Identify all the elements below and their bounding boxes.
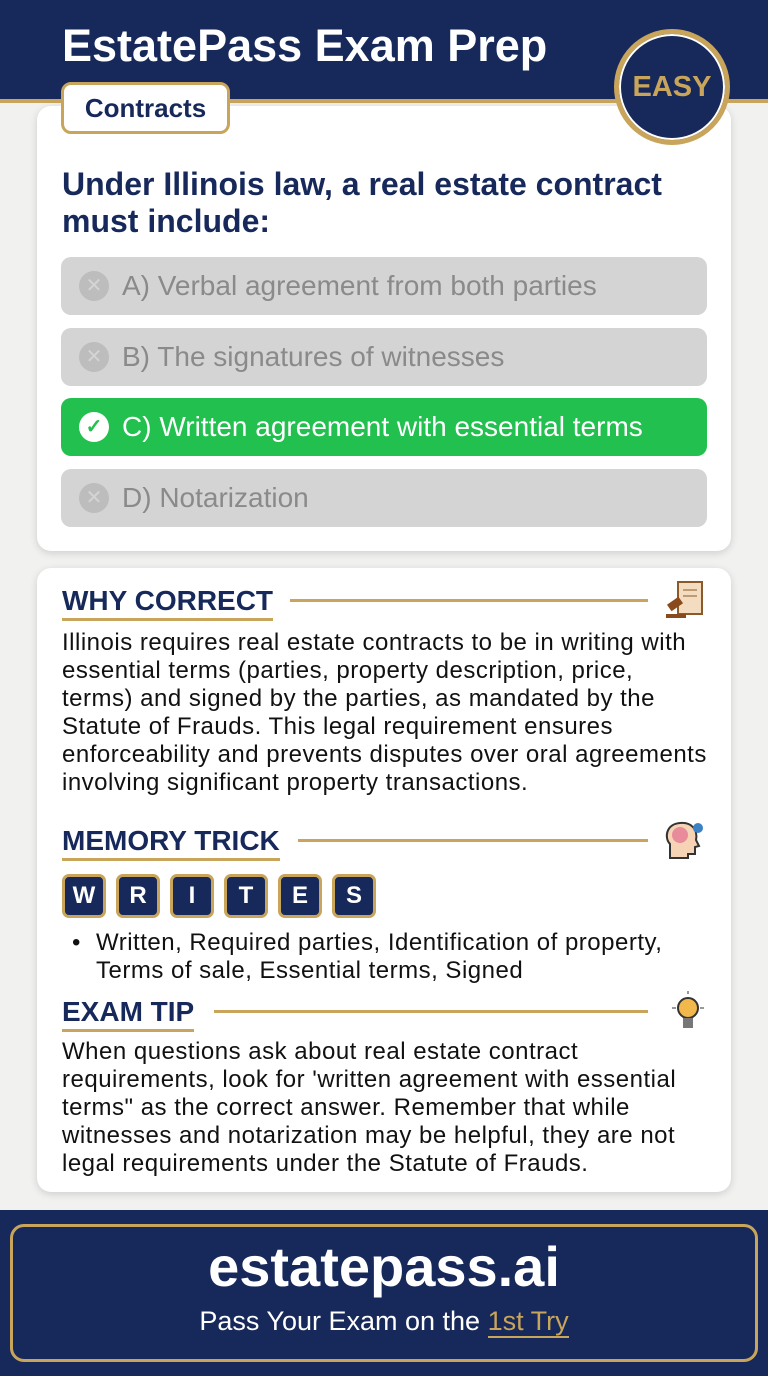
mnemonic tiles: S (346, 882, 362, 909)
icon: gavel scroll (666, 581, 703, 618)
option D: ✕ (86, 487, 102, 509)
heading: why correct: WHY CORRECT (62, 585, 273, 616)
text: why correct: Illinois requires real estate contracts to be in writing with (62, 629, 686, 656)
difficulty badge: EASY (632, 71, 711, 103)
text: why correct: essential terms (parties, property description, price, (62, 657, 633, 684)
heading: exam tip: EXAM TIP (62, 996, 194, 1027)
mnemonic bullet: Terms of sale, Essential terms, Signed (96, 957, 523, 984)
mnemonic tiles: W (73, 882, 95, 909)
text: why correct: Statute of Frauds. This legal requirement ensures (62, 713, 613, 740)
text: why correct: terms) and signed by the parties, as mandated by the (62, 685, 655, 712)
text: exam tip: legal requirements under the Statute of Frauds. (62, 1150, 588, 1177)
question: must include: (62, 203, 270, 239)
option A (61, 257, 707, 315)
option D: D) Notarization (122, 482, 309, 513)
heading: memory trick: MEMORY TRICK (62, 825, 280, 856)
panel: explanation card (37, 568, 731, 1192)
footer (0, 1210, 768, 1376)
footer tagline: Pass Your Exam on the 1st Try (199, 1306, 569, 1336)
question: Under Illinois law, a real estate contract (62, 166, 662, 202)
text: why correct: enforceability and prevents disputes over oral agreements (62, 741, 707, 768)
option B (61, 328, 707, 386)
question (62, 166, 662, 239)
panel: question card (37, 106, 731, 551)
text: exam tip: witnesses and notarization may be helpful, they are not (62, 1122, 675, 1149)
text: exam tip: requirements, look for 'written agreement with essential (62, 1066, 676, 1093)
footer brand: estatepass.ai (208, 1235, 560, 1298)
category tag: Contracts (85, 93, 206, 123)
text: why correct (62, 629, 707, 796)
option B: ✕ (86, 346, 102, 368)
text: exam tip: When questions ask about real estate contract (62, 1038, 578, 1065)
mnemonic bullet (72, 929, 662, 984)
text: exam tip (62, 1038, 676, 1177)
mnemonic tiles: R (129, 882, 147, 909)
icon: brain head (666, 822, 703, 859)
category tag (61, 82, 230, 134)
difficulty badge (614, 29, 730, 145)
mnemonic tiles: E (292, 882, 308, 909)
mnemonic bullet: • (72, 929, 81, 956)
footer box (10, 1224, 758, 1362)
mnemonic bullet: Written, Required parties, Identification of property, (96, 929, 662, 956)
option B: B) The signatures of witnesses (122, 341, 504, 372)
option A: A) Verbal agreement from both parties (122, 270, 597, 301)
text: why correct: involving significant property transactions. (62, 769, 528, 796)
text: exam tip: terms" as the correct answer. Remember that while (62, 1094, 630, 1121)
option C correct: ✓ (86, 416, 102, 438)
header band (0, 0, 768, 103)
option C correct (61, 398, 707, 456)
mnemonic tiles: I (189, 882, 195, 909)
mnemonic tiles (62, 874, 376, 918)
option D (61, 469, 707, 527)
option C correct: C) Written agreement with essential terms (122, 411, 643, 442)
icon: light bulb (672, 991, 704, 1028)
option A: ✕ (86, 275, 102, 297)
title: EstatePass Exam Prep (62, 20, 547, 71)
mnemonic tiles: T (239, 882, 253, 909)
